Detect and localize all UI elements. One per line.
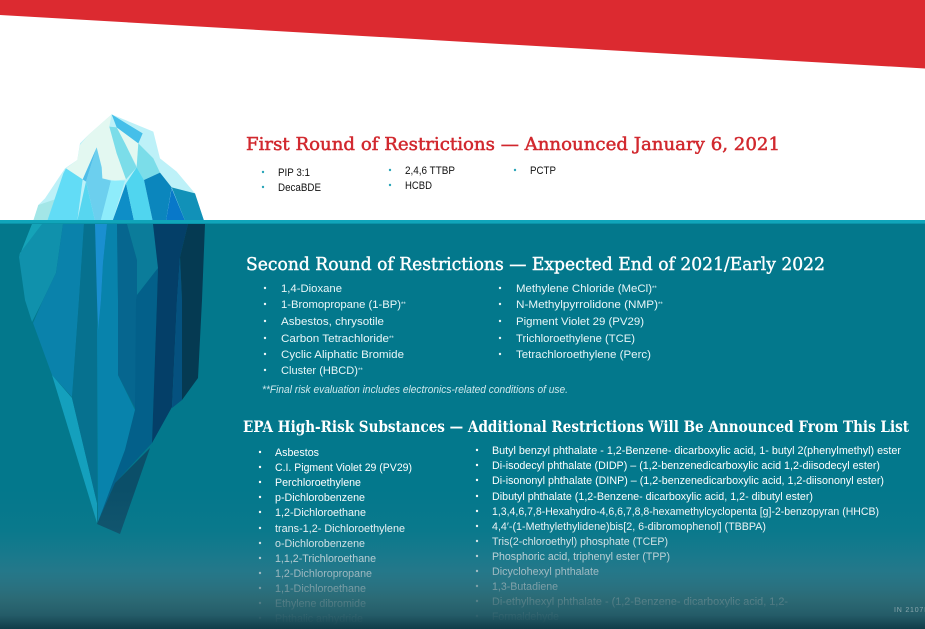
list: EPA substances left column: 1,2-Dichloroethane — [275, 507, 366, 519]
list: second round: ** — [401, 302, 406, 308]
iceberg above water — [33, 114, 204, 221]
list: second round: Trichloroethylene (TCE) — [516, 333, 635, 345]
list: second round: 1-Bromopropane (1-BP) — [281, 299, 401, 311]
list: second round: Methylene Chloride (MeCl) — [516, 283, 652, 295]
list: EPA substances left column: trans-1,2- Dichloroethylene — [275, 523, 405, 535]
list: second round: N-Methylpyrrolidone (NMP) — [516, 299, 658, 311]
list: EPA substances left column: C.I. Pigment Violet 29 (PV29) — [275, 462, 412, 474]
list: second round: Cluster (HBCD) — [281, 365, 358, 377]
list: EPA substances right column: Phosphoric acid, triphenyl ester (TPP) — [492, 551, 670, 563]
list: EPA substances left column: 1,2-Dichloropropane — [275, 568, 372, 580]
list: second round: Pigment Violet 29 (PV29) — [516, 316, 644, 328]
list: EPA substances right column: 1,3-Butadiene — [492, 581, 558, 593]
list: EPA substances right column: 4,4′-(1-Methylethylidene)bis[2, 6-dibromophenol] (TBBPA) — [492, 521, 766, 533]
list: EPA substances right column: Di-isodecyl phthalate (DIDP) – (1,2-benzenedicarboxylic acid 1,2-diisodecyl ester) — [492, 460, 880, 472]
water background — [0, 220, 925, 629]
red banner — [0, 0, 925, 68]
list: first round: 2,4,6 TTBP — [405, 165, 455, 177]
iceberg illustration — [19, 114, 205, 534]
list: second round: Tetrachloroethylene (Perc) — [516, 349, 651, 361]
list: first round — [262, 165, 556, 194]
list: second round: 1,4-Dioxane — [281, 283, 342, 295]
iceberg below water — [19, 224, 205, 534]
list: second round — [264, 283, 663, 377]
list: first round: PIP 3:1 — [278, 167, 310, 179]
waterline — [0, 220, 925, 224]
list: EPA substances right column: Formaldehyde — [492, 611, 559, 623]
heading: first round: First Round of Restrictions — Announced January 6, 2021 — [246, 134, 780, 155]
list: EPA substances right column: Di-ethylhexyl phthalate - (1,2-Benzene- dicarboxylic acid, 1,2- — [492, 596, 788, 608]
list: EPA substances left column — [259, 447, 412, 625]
list: EPA substances left column: Asbestos — [275, 447, 319, 459]
heading: second round: Second Round of Restrictions — Expected End of 2021/Early 2022 — [246, 254, 825, 275]
list: EPA substances left column: 1,1-Dichloroethane — [275, 583, 366, 595]
list: second round: ** — [652, 286, 657, 292]
list: second round: Cyclic Aliphatic Bromide — [281, 349, 404, 361]
list: EPA substances left column: Ethylene dibromide — [275, 598, 366, 610]
list: EPA substances right column: Butyl benzyl phthalate - 1,2-Benzene- dicarboxylic acid, 1- butyl 2(phenylmethyl) ester — [492, 445, 901, 457]
list: second round: Asbestos, chrysotile — [281, 316, 384, 328]
list: EPA substances right column: Di-isononyl phthalate (DINP) – (1,2-benzenedicarboxylic acid, 1,2-diisononyl ester) — [492, 475, 884, 487]
list: second round: ** — [658, 302, 663, 308]
list: first round: HCBD — [405, 180, 432, 192]
list: EPA substances right column: Dicyclohexyl phthalate — [492, 566, 599, 578]
list: second round: ** — [389, 336, 394, 342]
list: EPA substances left column: 1,1,2-Trichloroethane — [275, 553, 376, 565]
list: EPA substances right column: Dibutyl phthalate (1,2-Benzene- dicarboxylic acid, 1,2- dibutyl ester) — [492, 491, 813, 503]
list: first round: DecaBDE — [278, 182, 321, 194]
bottom fade — [0, 490, 925, 629]
list: EPA substances right column — [476, 445, 901, 623]
list: EPA substances left column: o-Dichlorobenzene — [275, 538, 365, 550]
list: second round: Carbon Tetrachloride — [281, 333, 389, 345]
list: EPA substances left column: Perchloroethylene — [275, 477, 361, 489]
list: EPA substances right column: Tris(2-chloroethyl) phosphate (TCEP) — [492, 536, 668, 548]
list: first round: PCTP — [530, 165, 556, 177]
list: EPA substances right column: 1,3,4,6,7,8-Hexahydro-4,6,6,7,8,8-hexamethylcyclopenta [g]-2-benzopyran (HHCB) — [492, 506, 879, 518]
list: EPA substances left column: p-Dichlorobenzene — [275, 492, 365, 504]
list: EPA substances left column: Phthalic anhydride — [275, 613, 363, 625]
list: second round: ** — [358, 368, 363, 374]
footnote: **Final risk evaluation includes electronics-related conditions of use. — [262, 384, 568, 396]
